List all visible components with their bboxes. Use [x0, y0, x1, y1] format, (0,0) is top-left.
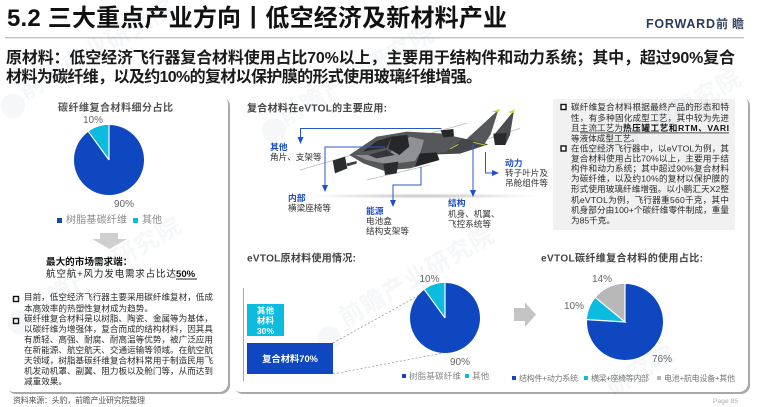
pie chart: carbon fibre share: 10%: [83, 115, 103, 126]
arrow: structure: [470, 144, 476, 197]
summary text: [6, 48, 735, 86]
text block: left bullets: [14, 291, 213, 386]
arrow: right: [514, 302, 536, 327]
chart: raw material bars with pie: 30%: [257, 326, 274, 336]
text block: left bullets: 减重效果。: [24, 376, 67, 386]
callout: largest demand market: 航空航+风力发电需求占比达: [46, 268, 176, 280]
arrow: interior: [322, 147, 385, 192]
arrow: down: [92, 233, 127, 249]
label: structure: 飞控系统等: [448, 218, 491, 229]
chart: raw material bars with pie: 其他: [472, 370, 490, 381]
text block: right grey box: 性，有多种固化成型工艺，其中较为先进: [571, 112, 729, 123]
legend: usage share: [512, 373, 735, 383]
text block: right grey box: 等液体成型工艺。: [571, 132, 640, 144]
label: power: 转子叶片及: [505, 167, 548, 178]
label: power: [505, 157, 548, 188]
pie chart: usage share: 14%: [592, 274, 612, 285]
title: 5.2 三大重点产业方向丨低空经济及新材料产业: [7, 4, 507, 32]
label: interior: 内部: [288, 192, 306, 203]
text block: right grey box: [553, 99, 735, 230]
legend: carbon fibre share: [57, 213, 162, 226]
text block: right grey box: 且主流工艺为: [571, 122, 623, 133]
label: energy: [366, 205, 409, 236]
panel: left carbon fibre share: [5, 95, 230, 394]
text block: left bullets: 在新能源、航空航天、交通运输等领域。在航空航: [24, 344, 213, 355]
label: energy: 能源: [366, 205, 384, 216]
logo: Forward: [646, 16, 744, 31]
text block: right grey box: 为85千克。: [571, 214, 615, 226]
text block: right grey box: 碳纤维复合材料根据最终产品的形态和特: [571, 101, 729, 112]
label: structure: [448, 197, 500, 229]
label: interior: 横梁座椅等: [288, 202, 331, 213]
label: others: 角片、支架等: [270, 151, 322, 162]
pie chart: usage share: 76%: [652, 354, 672, 365]
text block: left bullets: 以碳纤维为增强体，复合而成的结构材料，因其具: [24, 323, 213, 334]
callout: largest demand market: [46, 256, 197, 280]
chart: raw material bars with pie: 树脂基碳纤维: [409, 370, 461, 381]
summary text: 材料为碳纤维，以及约10%的复材以保护膜的形式使用玻璃纤维增强。: [6, 67, 482, 86]
chart: raw material bars with pie: 其他: [257, 304, 274, 316]
summary text: 原材料：低空经济飞行器复合材料使用占比70%以上，主要用于结构件和动力系统；其中，超过90%复合: [6, 48, 735, 67]
label: interior: [288, 192, 331, 213]
text: 前瞻产业研究院: [581, 63, 747, 175]
heading: carbon fibre composite usage: eVTOL碳纤维复合材料的使用占比:: [541, 252, 703, 264]
text: 研究院: [601, 339, 680, 401]
text block: left bullets: 有质轻、高强、耐腐、耐高温等优势，被广泛应用: [24, 334, 213, 344]
text block: right grey box: 机eVTOL为例，飞行器重560千克，其中: [571, 194, 729, 205]
chart: raw material bars with pie: 材料: [257, 314, 274, 326]
legend: carbon fibre share: 其他: [142, 213, 162, 226]
legend: usage share: 横梁+座椅等内部: [591, 373, 649, 383]
pie chart: carbon fibre share: [74, 115, 144, 210]
text block: right grey box: 为碳纤维，以及约10%的复材以保护膜的: [571, 172, 729, 184]
text: 前瞻产业研究院: [21, 211, 187, 323]
pie chart: carbon fibre share: 90%: [114, 199, 134, 210]
label: power: 动力: [505, 157, 523, 168]
arrow: power: [486, 152, 499, 176]
logo: Forward: 前瞻: [716, 16, 744, 31]
label: energy: 电池盒: [366, 215, 392, 226]
text block: right grey box: 复合材料使用占比70%以上，主要用于结: [571, 152, 729, 164]
chart: raw material bars with pie: 90%: [450, 357, 470, 368]
text block: left bullets: 机发动机罩、副翼、阻力板以及舱门等，从而达到: [24, 365, 213, 376]
pie chart: usage share: [564, 274, 672, 365]
source note: 资料来源：头豹，前瞻产业研究院整理: [13, 395, 145, 405]
label: energy: 结构支架等: [366, 225, 409, 236]
legend: carbon fibre share: 树脂基碳纤维: [66, 213, 127, 226]
text block: right grey box: 形式使用玻璃纤维增强。以小鹏汇天X2整: [571, 183, 729, 194]
chart: raw material bars with pie: 10%: [420, 274, 440, 285]
text block: left bullets: 本高效率的热塑性复材成为趋势。: [24, 302, 153, 314]
callout: largest demand market: 50%: [176, 269, 196, 280]
text block: right grey box: 热压罐工艺和RTM、VARI: [623, 122, 729, 133]
text block: left bullets: 碳纤维复合材料是以树脂、陶瓷、金属等为基体，: [24, 312, 213, 324]
text block: right grey box: 在低空经济飞行器中，以eVTOL为例，其: [571, 142, 729, 154]
text block: left bullets: 目前，低空经济飞行器主要采用碳纤维复材，低成: [24, 291, 213, 302]
legend: usage share: 结构件+动力系统: [519, 373, 578, 383]
logo: Forward: FORWARD: [646, 17, 715, 31]
arrow: energy: [390, 167, 421, 207]
heading: carbon fibre composite breakdown: 碳纤维复合材料细分占比: [58, 101, 173, 114]
label: structure: 机身、机翼、: [448, 208, 500, 219]
text block: right grey box: 构件和动力系统；其中超过90%复合材料: [571, 162, 729, 174]
label: structure: 结构: [448, 197, 466, 208]
text: 前瞻产业研究院: [274, 19, 440, 131]
illustration: eVTOL aircraft: [300, 109, 540, 199]
text: 前瞻产业研究院: [334, 220, 500, 332]
chart: raw material bars with pie: 复合材料70%: [262, 353, 319, 364]
pie chart: usage share: 10%: [564, 301, 584, 312]
chart: raw material bars with pie: [243, 274, 490, 381]
text block: left bullets: 天领域，树脂基碳纤维复合材料常用于制造民用飞: [24, 354, 213, 366]
arrow: others: [298, 128, 442, 144]
heading: raw material usage: eVTOL原材料使用情况:: [247, 252, 356, 264]
label: others: 其他: [270, 141, 288, 152]
callout: largest demand market: 最大的市场需求端：: [46, 256, 132, 268]
panel: right eVTOL applications: [232, 95, 750, 394]
heading: main applications: 复合材料在eVTOL的主要应用:: [247, 102, 387, 114]
text block: right grey box: 机身部分由100+个碳纤维零件制成，重量: [571, 204, 729, 215]
label: power: 吊舱组件等: [505, 177, 548, 188]
legend: usage share: 电池+航电设备+其他: [664, 373, 735, 383]
page number: Page 85: [713, 398, 738, 405]
label: others: [270, 141, 322, 162]
